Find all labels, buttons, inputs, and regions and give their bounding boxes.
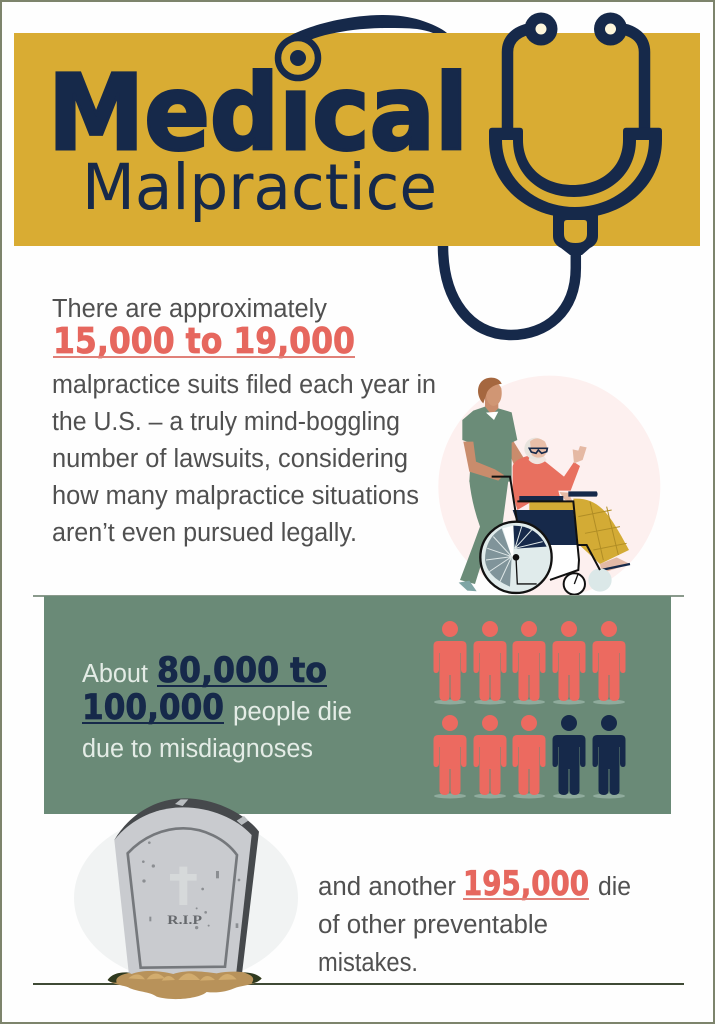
icon: stethoscope [278, 12, 662, 335]
stethoscope chest tube [443, 246, 576, 335]
stethoscope stem [553, 212, 598, 255]
illustration: tombstone [108, 798, 262, 999]
text block: misdiagnosis statistic: About [82, 660, 148, 688]
wheelchair blanket and patient [513, 438, 630, 573]
dirt mound [108, 971, 262, 999]
heading: Medical: Medical [48, 52, 468, 174]
stethoscope right earpiece [594, 12, 627, 46]
illustration: nurse pushing patient in wheelchair [438, 376, 660, 598]
statistic: 195,000: 195,000 [463, 864, 589, 904]
text block: lawsuits statistic: how many malpractice situations [52, 482, 419, 510]
gap patch under letter i [283, 78, 311, 87]
cross [170, 867, 197, 905]
icon array: people, 8 of 10 highlighted [434, 621, 626, 798]
stethoscope upper tube [288, 15, 447, 40]
text block: misdiagnosis statistic: people die [233, 698, 352, 726]
stethoscope U-shaped bow [489, 128, 662, 218]
text block: lawsuits statistic: There are approximately [52, 295, 327, 323]
text block: preventable mistakes statistic: and another [318, 873, 457, 901]
tombstone face [114, 807, 252, 978]
small front wheel [564, 573, 585, 595]
text block: preventable mistakes statistic: die [598, 873, 631, 901]
text block: preventable mistakes statistic [318, 864, 631, 977]
panel: misdiagnosis deaths [44, 596, 671, 814]
divider lines [33, 595, 684, 597]
heading: Malpractice: Malpractice [82, 151, 437, 224]
stethoscope ear tubes [508, 28, 644, 132]
text block: misdiagnosis statistic: due to misdiagnoses [82, 735, 313, 763]
text block: lawsuits statistic [52, 295, 436, 547]
text block: misdiagnosis statistic [82, 651, 352, 763]
ground line [33, 983, 684, 985]
text block: preventable mistakes statistic: mistakes. [318, 949, 418, 977]
stethoscope diaphragm [278, 38, 318, 78]
stethoscope bow inner band [502, 140, 649, 207]
stone speckles [142, 841, 240, 929]
text block: lawsuits statistic: aren’t even pursued legally. [52, 519, 357, 547]
text block: lawsuits statistic: number of lawsuits, considering [52, 445, 408, 473]
wheelchair [480, 477, 612, 595]
statistic: 15,000 to 19,000: 15,000 to 19,000 [53, 321, 355, 362]
grey background circle behind tombstone [74, 814, 298, 982]
text block: lawsuits statistic: the U.S. – a truly mind-boggling [52, 408, 400, 436]
stethoscope left earpiece [524, 12, 558, 46]
text block: preventable mistakes statistic: of other preventable [318, 911, 548, 939]
tombstone side and top edge [114, 798, 259, 977]
engraved text: R.I.P: R.I.P [167, 913, 202, 927]
title banner [14, 33, 700, 246]
stethoscope stem window [564, 220, 587, 243]
text block: misdiagnosis statistic: 80,000 to [157, 651, 327, 691]
text block: misdiagnosis statistic: 100,000 [82, 688, 224, 728]
text block: lawsuits statistic: malpractice suits filed each year in [52, 371, 436, 399]
nurse [459, 378, 524, 591]
inner frame [128, 828, 237, 968]
large rear wheel [480, 522, 552, 593]
pink background circle [438, 376, 660, 598]
